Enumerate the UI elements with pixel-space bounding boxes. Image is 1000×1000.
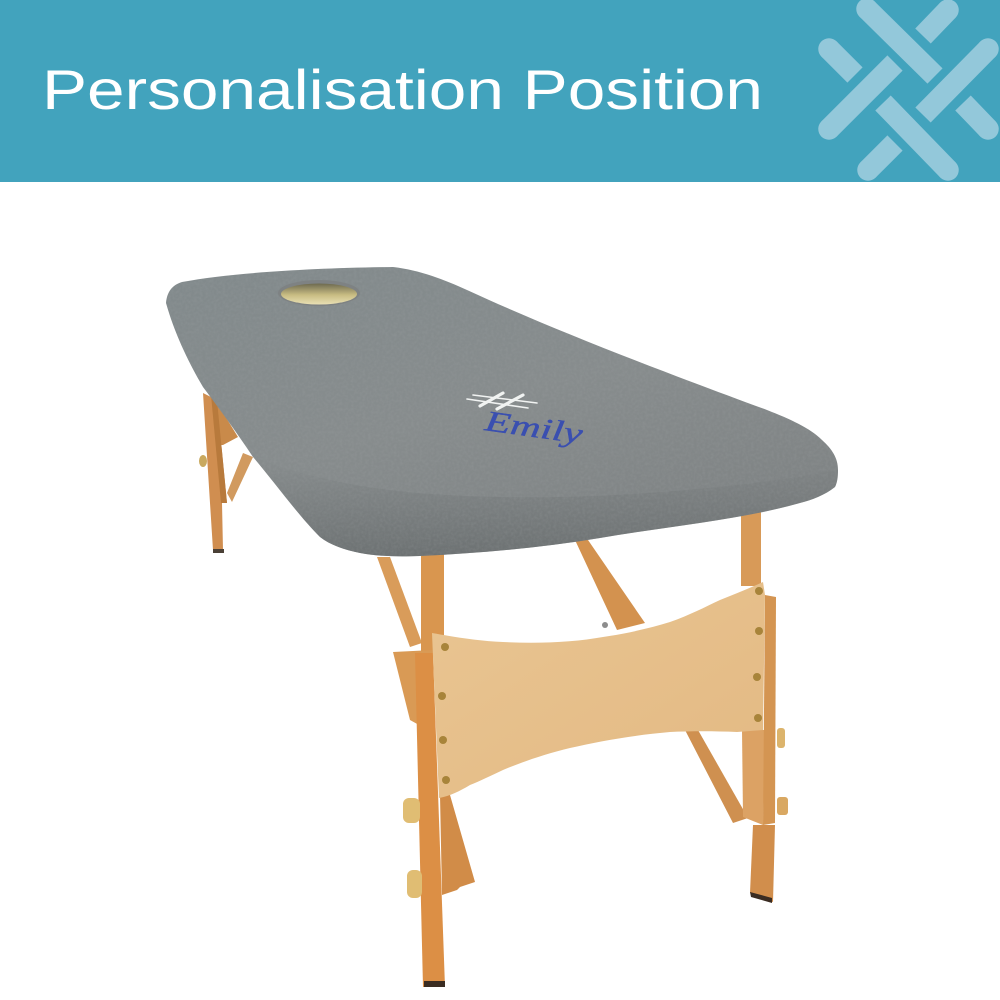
massage table photo illustration: [166, 267, 838, 987]
face hole: [278, 280, 360, 306]
rivets: [438, 587, 763, 784]
far left leg: [199, 393, 253, 553]
plywood cross panel: [432, 582, 765, 798]
front left leg assembly: [377, 554, 475, 987]
title: Personalisation Position: [42, 58, 763, 121]
embroidered name: Emily: [482, 405, 585, 451]
header banner: [0, 0, 1000, 182]
embroidered logo: [467, 393, 537, 409]
grey table cover: [166, 267, 838, 556]
rear diagonal brace: [575, 540, 748, 823]
icon: woven logo: [818, 0, 999, 181]
front right leg assembly: [741, 510, 788, 903]
